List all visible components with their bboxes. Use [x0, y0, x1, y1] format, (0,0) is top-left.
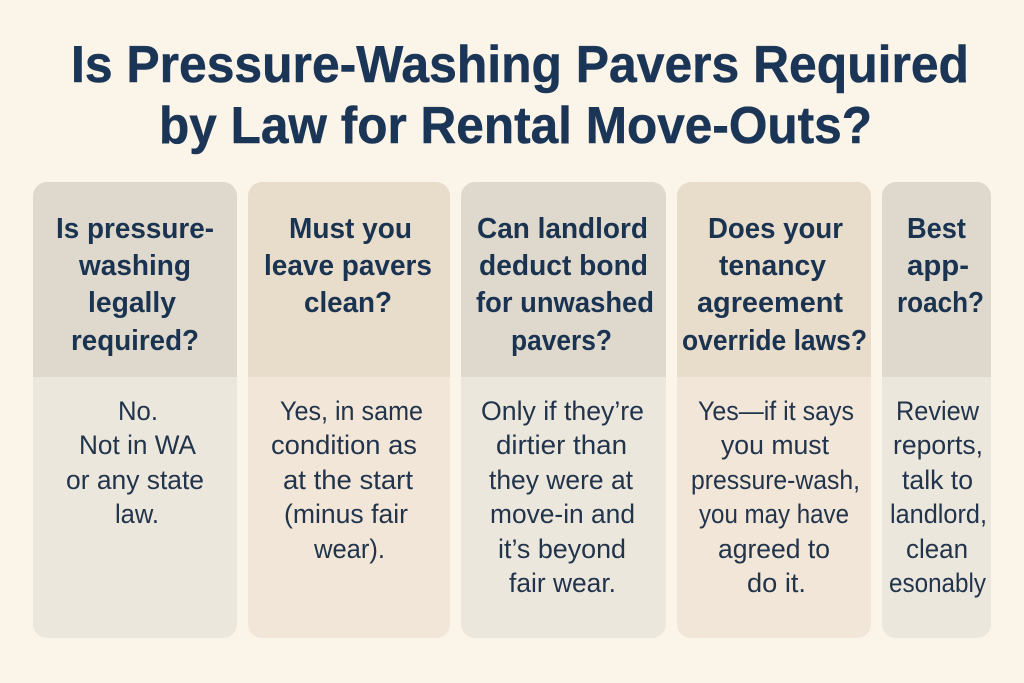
- panel: does tenancy agreement override laws: [677, 182, 871, 638]
- panel header: question 1: [33, 182, 237, 377]
- panel body: answer 2: wear).: [313, 534, 385, 564]
- panel body: answer 3: they were at: [489, 465, 633, 495]
- panel body: answer 5: reports,: [893, 430, 983, 460]
- panel body: answer 4: do it.: [747, 568, 806, 598]
- panel header: question 4: override laws?: [682, 325, 867, 357]
- panel body: answer 4: Yes—if it says: [698, 396, 854, 426]
- panel body: answer 4: you may have: [699, 499, 849, 529]
- panel header: question 2: leave pavers: [264, 250, 432, 282]
- panel body: answer 2: condition as: [271, 430, 417, 460]
- panel header: question 4: Does your: [708, 213, 843, 245]
- panel body: answer 1: or any state: [66, 465, 204, 495]
- panel header: question 1: washing: [78, 250, 191, 282]
- panel body: answer 5: [882, 377, 991, 638]
- panel header: question 2: [248, 182, 450, 377]
- panel: best approach: [882, 182, 991, 638]
- panel body: answer 4: pressure-wash,: [691, 465, 860, 495]
- panel header: question 3: [461, 182, 666, 377]
- panel body: answer 5: landlord,: [890, 499, 987, 529]
- panel body: answer 2: [248, 377, 450, 638]
- panel header: question 1: required?: [71, 325, 199, 357]
- panel header: question 5: app-: [907, 250, 969, 282]
- panel body: answer 5: Review: [896, 396, 979, 426]
- panel body: answer 1: Not in WA: [79, 430, 196, 460]
- panel header: question 2: Must you: [289, 213, 412, 245]
- panel header: question 3: for unwashed: [476, 287, 654, 319]
- panel body: answer 2: at the start: [283, 465, 413, 495]
- panel: is pressure-washing legally required: [33, 182, 237, 638]
- panel header: question 1: legally: [88, 287, 176, 319]
- panel body: answer 3: it’s beyond: [498, 534, 626, 564]
- panel body: answer 3: [461, 377, 666, 638]
- panel header: question 3: pavers?: [511, 325, 612, 357]
- panel body: answer 4: [677, 377, 871, 638]
- panel header: question 4: tenancy: [719, 250, 826, 282]
- panel body: answer 3: Only if they’re: [481, 396, 644, 426]
- panel body: answer 5: talk to: [902, 465, 973, 495]
- panel body: answer 1: No.: [118, 396, 158, 426]
- panel header: question 1: Is pressure-: [56, 213, 214, 245]
- panel header: question 4: [677, 182, 871, 377]
- panel header: question 2: clean?: [304, 287, 392, 319]
- panel body: answer 1: [33, 377, 237, 638]
- panel body: answer 4: you must: [721, 430, 829, 460]
- panel header: question 3: deduct bond: [479, 250, 648, 282]
- panel body: answer 2: (minus fair: [284, 499, 408, 529]
- panel body: answer 2: Yes, in same: [280, 396, 423, 426]
- panel body: answer 5: esonably: [889, 568, 986, 598]
- panel body: answer 3: move-in and: [490, 499, 635, 529]
- panel body: answer 3: dirtier than: [496, 430, 627, 460]
- panel body: answer 5: clean: [906, 534, 968, 564]
- panel body: answer 3: fair wear.: [509, 568, 616, 598]
- panel: must you leave pavers clean: [248, 182, 450, 638]
- panel header: question 3: Can landlord: [477, 213, 648, 245]
- panel header: question 5: roach?: [897, 287, 984, 319]
- panel body: answer 4: agreed to: [718, 534, 830, 564]
- panel header: question 5: Best: [907, 213, 966, 245]
- title: by Law for Rental Move-Outs?: [159, 97, 872, 155]
- panel header: question 5: [882, 182, 991, 377]
- title: Is Pressure-Washing Pavers Required: [71, 36, 969, 94]
- panel: can landlord deduct bond: [461, 182, 666, 638]
- title: [71, 36, 969, 155]
- panel body: answer 1: law.: [115, 499, 159, 529]
- panel header: question 4: agreement: [697, 287, 843, 319]
